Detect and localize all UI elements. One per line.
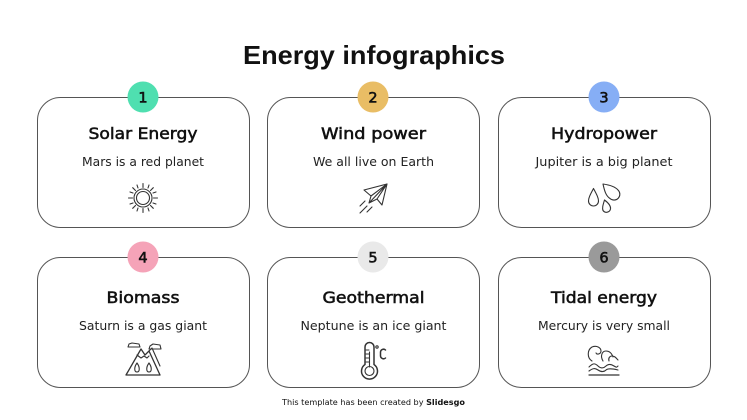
panel: solar energy: 1 xyxy=(138,90,148,106)
panel: wind power: Wind power xyxy=(321,124,426,143)
title: Energy infographics xyxy=(243,40,505,70)
panel: tidal energy: 6 xyxy=(599,250,609,266)
panel: wind power xyxy=(268,82,480,228)
panel: biomass: 4 xyxy=(138,250,148,266)
panel: solar energy: Mars is a red planet xyxy=(82,154,204,169)
panel: hydropower: 3 xyxy=(599,90,609,106)
footer credit: This template has been created by Slidesgo xyxy=(281,398,465,407)
panel: hydropower: Hydropower xyxy=(551,124,657,143)
panel: hydropower: Jupiter is a big planet xyxy=(534,154,673,169)
panel: geothermal: Neptune is an ice giant xyxy=(300,318,447,333)
panel: tidal energy xyxy=(498,242,710,388)
panel: geothermal: 5 xyxy=(368,250,378,266)
icon: mountains xyxy=(126,343,161,375)
panel: hydropower xyxy=(498,82,710,228)
icon: paper plane xyxy=(360,184,387,213)
icon: sun xyxy=(128,184,158,212)
panel: biomass xyxy=(38,242,250,388)
panel: solar energy xyxy=(38,82,250,228)
panel: geothermal: Geothermal xyxy=(322,288,424,307)
panel: wind power: We all live on Earth xyxy=(313,154,434,169)
panel: geothermal xyxy=(268,242,480,388)
panel: tidal energy: Mercury is very small xyxy=(538,318,670,333)
icon: waves xyxy=(588,346,619,375)
icon: thermometer xyxy=(361,342,386,379)
icon: water drops xyxy=(588,184,620,212)
panel: solar energy: Solar Energy xyxy=(88,124,198,143)
panel: biomass: Saturn is a gas giant xyxy=(79,318,207,333)
panel: tidal energy: Tidal energy xyxy=(550,288,657,307)
panel: wind power: 2 xyxy=(368,90,378,106)
panel: biomass: Biomass xyxy=(106,288,180,307)
